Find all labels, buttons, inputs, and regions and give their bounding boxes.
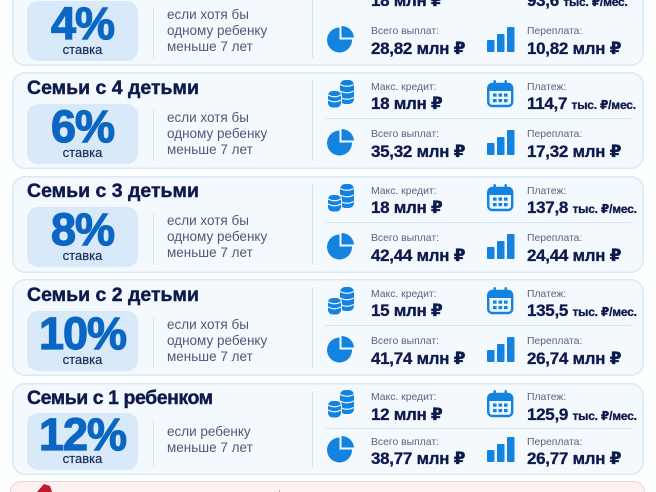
condition text: [167, 213, 268, 260]
overpayment label: Переплата:: [527, 233, 582, 244]
rate caption: ставка: [63, 352, 102, 367]
overpayment label: Переплата:: [527, 129, 582, 140]
condition text: меньше 7 лет: [167, 142, 253, 157]
condition text: одному ребенку: [167, 23, 267, 38]
overpayment value: 26,74 млн ₽: [527, 349, 621, 368]
rate value: 12%: [39, 409, 126, 460]
vertical divider: [312, 391, 313, 467]
heading: Семьи с 4 детьми: [27, 77, 199, 99]
rate badge 4%: [27, 1, 138, 61]
icon: calendar: [487, 184, 514, 212]
payment label: Платеж:: [527, 82, 566, 93]
rate badge 12%: [27, 413, 138, 470]
rate caption: ставка: [63, 42, 102, 57]
icon: coins: [328, 80, 354, 108]
vertical divider: [312, 0, 313, 58]
rate badge 8%: [27, 207, 138, 267]
icon: bar chart: [487, 130, 514, 155]
icon: bar chart: [487, 27, 514, 52]
vertical divider: [153, 214, 154, 265]
payment label: Платеж:: [527, 289, 566, 300]
icon: calendar: [487, 287, 514, 314]
total payments label: Всего выплат:: [371, 129, 439, 140]
vertical divider: [312, 287, 313, 368]
horizontal divider: [325, 325, 631, 326]
overpayment value: 17,32 млн ₽: [527, 142, 621, 161]
max loan value: 18 млн ₽: [371, 94, 442, 113]
payment value: 114,7 тыс. ₽/мес.: [527, 94, 636, 113]
condition text: если хотя бы: [167, 317, 249, 332]
panel: family with 3 children: [12, 176, 644, 273]
condition text: меньше 7 лет: [167, 349, 253, 364]
vertical divider: [279, 490, 280, 492]
icon: red warning mark: [37, 484, 52, 492]
total payments label: Всего выплат:: [371, 233, 439, 244]
max loan label: Макс. кредит:: [371, 392, 437, 403]
panel: family with 4 children: [12, 72, 644, 169]
overpayment label: Переплата:: [527, 437, 582, 448]
total payments value: 35,32 млн ₽: [371, 142, 465, 161]
vertical divider: [153, 7, 154, 58]
panel: family with 5 children: [12, 0, 644, 66]
horizontal divider: [325, 118, 631, 119]
icon: coins: [328, 184, 354, 212]
vertical divider: [153, 420, 154, 467]
icon: bar chart: [487, 337, 514, 362]
condition text: меньше 7 лет: [167, 440, 253, 455]
max loan label: Макс. кредит:: [371, 186, 437, 197]
max loan label: Макс. кредит:: [371, 82, 437, 93]
overpayment value: 24,44 млн ₽: [527, 246, 621, 265]
icon: pie chart: [327, 336, 354, 362]
icon: pie chart: [327, 436, 354, 462]
condition text: [167, 110, 268, 157]
condition text: меньше 7 лет: [167, 39, 253, 54]
condition text: если ребенку: [167, 424, 251, 439]
panel: red warning strip: [10, 481, 645, 492]
vertical divider: [312, 184, 313, 265]
overpayment label: Переплата:: [527, 26, 582, 37]
condition text: если хотя бы: [167, 213, 249, 228]
condition text: [167, 424, 253, 455]
rate caption: ставка: [63, 248, 102, 263]
icon: bar chart: [487, 437, 514, 462]
condition text: одному ребенку: [167, 229, 267, 244]
icon: calendar: [487, 390, 514, 418]
total payments label: Всего выплат:: [371, 26, 439, 37]
max loan label: Макс. кредит:: [371, 289, 437, 300]
icon: coins: [328, 287, 354, 314]
heading: Семьи с 2 детьми: [27, 284, 199, 306]
rate caption: ставка: [63, 451, 102, 466]
horizontal divider: [325, 428, 631, 429]
rate badge 10%: [27, 311, 138, 371]
max loan value: 15 млн ₽: [371, 301, 442, 320]
icon: pie chart: [327, 233, 354, 260]
payment value: 135,5 тыс. ₽/мес.: [527, 301, 637, 320]
condition text: [167, 7, 268, 54]
payment value: 137,8 тыс. ₽/мес.: [527, 198, 637, 217]
total payments value: 38,77 млн ₽: [371, 449, 465, 468]
overpayment value: 26,77 млн ₽: [527, 449, 621, 468]
condition text: одному ребенку: [167, 126, 267, 141]
condition text: если хотя бы: [167, 110, 249, 125]
panel: family with 1 child: [12, 383, 644, 475]
icon: pie chart: [327, 26, 354, 52]
vertical divider: [153, 317, 154, 368]
condition text: если хотя бы: [167, 7, 249, 22]
payment value: 125,9 тыс. ₽/мес.: [527, 405, 637, 424]
icon: bar chart: [487, 234, 514, 259]
condition text: меньше 7 лет: [167, 245, 253, 260]
vertical divider: [153, 110, 154, 161]
icon: coins: [328, 390, 354, 418]
total payments value: 41,74 млн ₽: [371, 349, 465, 368]
panel: family with 2 children: [12, 279, 644, 376]
overpayment label: Переплата:: [527, 336, 582, 347]
heading: Семьи с 1 ребенком: [27, 387, 213, 409]
condition text: одному ребенку: [167, 333, 267, 348]
total payments value: 42,44 млн ₽: [371, 246, 465, 265]
icon: calendar: [487, 80, 514, 108]
max loan value: 12 млн ₽: [371, 405, 442, 424]
payment label: Платеж:: [527, 392, 566, 403]
heading: Семьи с 3 детьми: [27, 180, 199, 202]
rate badge 6%: [27, 104, 138, 164]
total payments label: Всего выплат:: [371, 437, 439, 448]
vertical divider: [312, 80, 313, 161]
rate value: 10%: [39, 308, 126, 359]
total payments value: 28,82 млн ₽: [371, 39, 465, 58]
overpayment value: 10,82 млн ₽: [527, 39, 621, 58]
max loan value: 18 млн ₽: [371, 198, 442, 217]
horizontal divider: [325, 222, 631, 223]
rate caption: ставка: [63, 145, 102, 160]
total payments label: Всего выплат:: [371, 336, 439, 347]
icon: pie chart: [327, 129, 354, 156]
rate value: 8%: [51, 204, 114, 255]
payment label: Платеж:: [527, 186, 566, 197]
condition text: [167, 317, 268, 364]
rate value: 6%: [51, 101, 114, 152]
